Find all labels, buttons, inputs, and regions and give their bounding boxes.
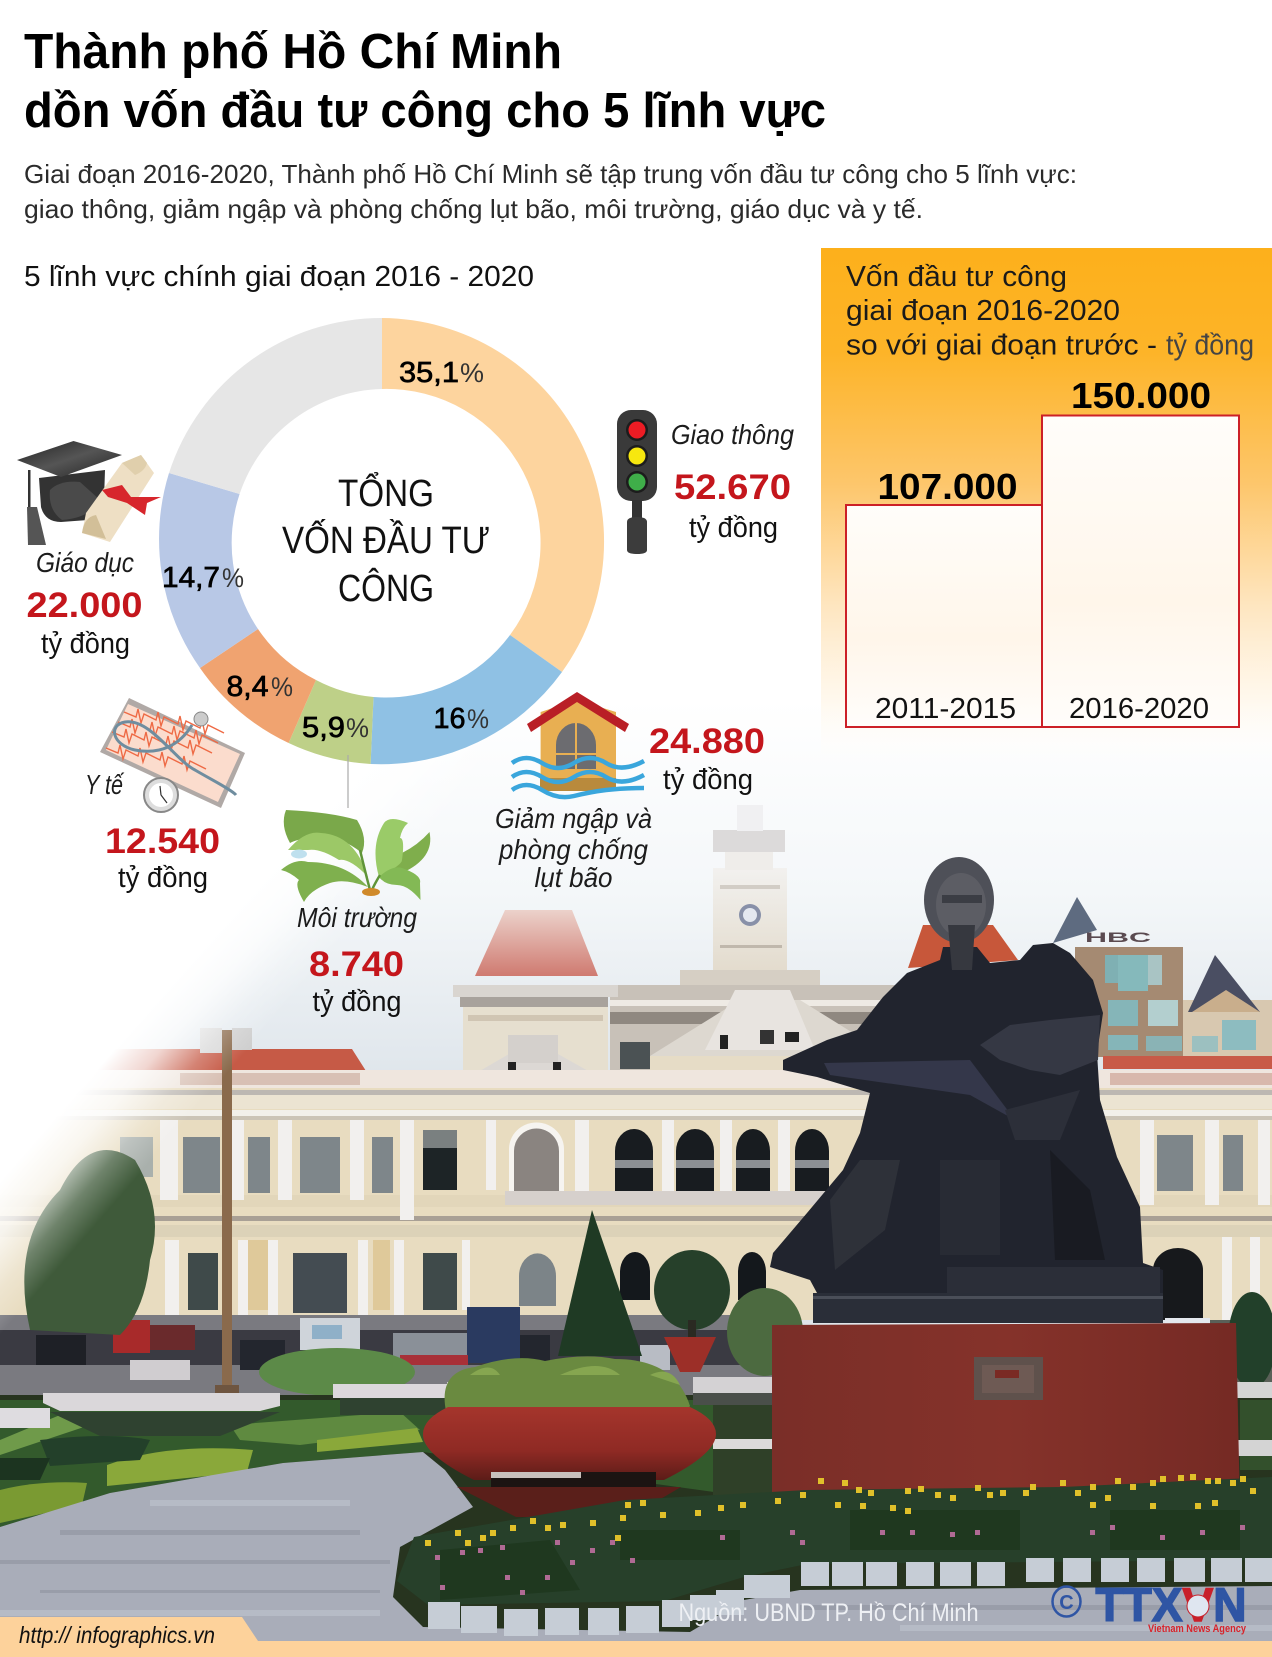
label 14,7% <box>162 562 244 594</box>
logo: TTXVN: C <box>1059 1592 1074 1614</box>
bar 2011-2015: 2011-2015 <box>875 693 1016 725</box>
bar 2016-2020: 150.000 <box>1071 375 1211 416</box>
panel heading: so với giai đoạn trước - <box>846 330 1157 362</box>
label: giao duc: Giáo dục <box>36 547 134 578</box>
label: moi truong: 8.740 <box>309 945 404 984</box>
panel heading: Vốn đầu tư công <box>846 261 1067 293</box>
value: giam ngap: 24.880 <box>649 722 765 761</box>
segment: giam ngap 16% <box>371 635 562 764</box>
lawn and shrubs <box>0 1400 1272 1527</box>
icon: ECG chart and stethoscope <box>100 698 245 812</box>
label: giao thong <box>671 419 794 544</box>
red roof behind the statue head <box>908 925 1018 968</box>
centre label: TỔNG <box>338 470 434 515</box>
label 5,9%: 5,9 <box>302 712 345 744</box>
palm <box>654 1250 730 1330</box>
label: giao duc <box>26 547 142 660</box>
segment: giao duc 14.7% <box>159 473 258 668</box>
white planters <box>0 1377 1272 1456</box>
label: giao thong: 52.670 <box>674 468 791 507</box>
parked cars <box>467 1307 520 1363</box>
label: moi truong <box>297 902 417 1018</box>
flower bed <box>397 1474 1272 1636</box>
label: moi truong: tỷ đồng <box>312 986 402 1018</box>
bottom bar <box>0 1641 1272 1657</box>
bar 2011-2015: 107.000 <box>878 466 1018 507</box>
label 5,9%: % <box>346 713 369 743</box>
value: y te: 12.540 <box>105 822 220 861</box>
background buildings at right: HBC <box>1085 929 1151 945</box>
bar 2011-2015 <box>846 466 1042 727</box>
right bush <box>727 1288 803 1376</box>
yellow flowers <box>425 1474 1256 1546</box>
statue pedestal <box>772 1323 1240 1515</box>
facade white pilasters <box>160 1120 1270 1320</box>
label: giam ngap: Giảm ngập và <box>495 803 652 834</box>
paved path <box>0 1452 1272 1645</box>
intro paragraph <box>24 159 1077 224</box>
lower windows and doors <box>188 1253 457 1310</box>
value: y te <box>105 822 220 894</box>
title <box>24 25 826 138</box>
statue head <box>924 857 994 943</box>
statue arms and child <box>824 1060 1015 1120</box>
label 8,4% <box>226 671 293 703</box>
donut heading: 5 lĩnh vực chính giai đoạn 2016 - 2020 <box>24 261 534 293</box>
central roofline and pediment <box>610 985 910 1070</box>
label: moi truong: Môi trường <box>297 902 417 933</box>
bronze statue <box>770 857 1163 1323</box>
value: giam ngap <box>649 722 765 796</box>
label 35,1% <box>399 357 484 389</box>
pink flowers <box>435 1525 1245 1595</box>
round shrub <box>259 1348 415 1396</box>
segment: giao thong 35.1% <box>382 318 604 672</box>
lamp post <box>200 1028 252 1393</box>
leader line <box>347 755 349 808</box>
logo: TTXVN: Vietnam News Agency <box>1148 1623 1247 1635</box>
icon: traffic light <box>617 410 657 554</box>
intro paragraph: giao thông, giảm ngập và phòng chống lụt bão, môi trường, giáo dục và y tế. <box>24 194 923 224</box>
street band with cars and trees <box>0 1150 1272 1400</box>
panel heading <box>846 261 1254 362</box>
label: y te: Y tế <box>85 769 125 800</box>
donut chart <box>159 318 604 764</box>
left fade to white <box>0 700 760 1420</box>
intro paragraph: Giai đoạn 2016-2020, Thành phố Hồ Chí Minh sẽ tập trung vốn đầu tư công cho 5 lĩnh vực: <box>24 159 1077 189</box>
label: giao duc: tỷ đồng <box>41 628 130 660</box>
label 8,4%: % <box>271 672 293 702</box>
right wing red roof <box>1103 1056 1272 1069</box>
panel background <box>821 248 1272 770</box>
title: dồn vốn đầu tư công cho 5 lĩnh vực <box>24 84 826 138</box>
value: y te: tỷ đồng <box>118 862 208 894</box>
big red flower pot <box>423 1356 716 1517</box>
upper windows <box>183 1135 1243 1193</box>
left pavilion <box>453 985 618 1074</box>
left tree <box>24 1150 155 1335</box>
website tab: http:// infographics.vn <box>19 1622 215 1648</box>
segment: moi truong 5.9% <box>289 680 374 764</box>
label 16% <box>434 703 489 735</box>
label: giam ngap: lụt bão <box>534 862 612 893</box>
label 35,1%: % <box>460 358 484 388</box>
panel: public investment comparison <box>821 248 1272 770</box>
white flower pots <box>428 1558 1272 1636</box>
panel heading: giai đoạn 2016-2020 <box>846 295 1120 327</box>
label 14,7%: % <box>222 563 244 593</box>
label: giam ngap: phòng chống <box>498 834 648 865</box>
panel heading: tỷ đồng <box>1166 330 1254 362</box>
centre label <box>282 470 490 610</box>
segment: other <box>169 318 382 494</box>
central arched windows <box>509 1123 564 1191</box>
label 5,9% <box>302 712 369 744</box>
central dome <box>475 910 598 976</box>
background photo: city hall and statue <box>0 700 1272 1645</box>
main facade <box>0 1070 1272 1320</box>
centre conifer <box>558 1210 642 1356</box>
value: giam ngap: tỷ đồng <box>663 764 753 796</box>
statue base <box>947 1267 1160 1293</box>
label: giao thong: Giao thông <box>671 419 794 450</box>
label 16%: % <box>467 704 489 734</box>
icon: flooded house <box>512 692 644 797</box>
label 14,7%: 14,7 <box>162 562 220 594</box>
background buildings at right <box>1053 897 1272 1057</box>
icon: graduation cap and diploma <box>17 441 161 545</box>
clock tower <box>680 805 820 990</box>
bar 2016-2020: 2016-2020 <box>1069 693 1209 725</box>
centre label: VỐN ĐẦU TƯ <box>282 517 490 562</box>
source credit: Nguồn: UBND TP. Hồ Chí Minh <box>678 1599 978 1627</box>
segment: y te 8.4% <box>200 629 316 743</box>
label 35,1%: 35,1 <box>399 357 459 389</box>
dark ground base <box>0 1395 1272 1645</box>
icon: green leaves <box>281 810 430 902</box>
label: giao thong: tỷ đồng <box>689 512 778 544</box>
photo sky <box>0 700 1272 1340</box>
bar 2016-2020 <box>1042 375 1239 727</box>
left wing red roof <box>60 1049 366 1071</box>
centre label: CÔNG <box>338 566 434 610</box>
label 16%: 16 <box>434 703 466 735</box>
label: giao duc: 22.000 <box>26 586 142 625</box>
label 8,4%: 8,4 <box>226 671 268 703</box>
label: giam ngap <box>495 803 652 893</box>
title: Thành phố Hồ Chí Minh <box>24 25 562 79</box>
small red pot <box>664 1337 716 1372</box>
logo: TTXVN: TTXVN <box>1096 1578 1246 1631</box>
